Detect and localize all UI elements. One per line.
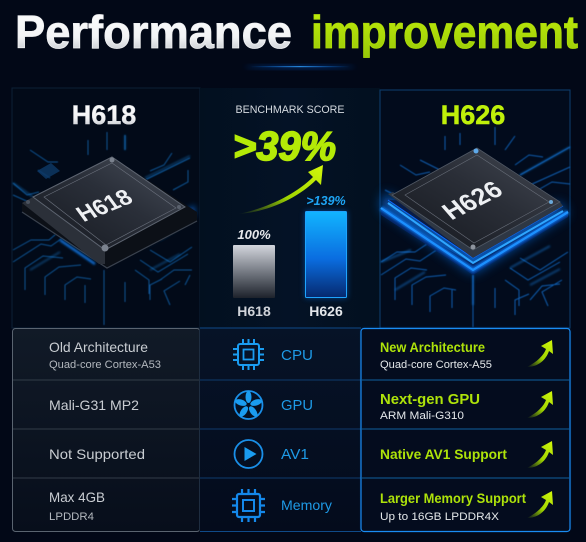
H626 heading: H626 [441,100,505,130]
row CPU new: New Architecture [380,339,485,355]
label: GPU: GPU [281,397,313,414]
chip H626 [381,148,568,275]
row GPU new: Next-gen GPU [380,392,480,408]
row GPU new: ARM Mali-G310 [380,410,464,422]
icon: CPU [233,339,264,370]
icon: AV1 play [234,440,262,468]
row GPU new [380,391,553,422]
comparison table: feature column [200,328,361,532]
panel: H618 [12,88,200,328]
row AV1 new [380,441,553,468]
glow beside chip [145,205,195,245]
row CPU old: Quad-core Cortex-A53 [49,359,161,371]
label: CPU: CPU [281,347,313,364]
circuit traces [13,132,192,325]
row CPU old [49,339,161,371]
value >139%: >139% [306,194,346,208]
arrow up [527,340,553,367]
row memory new: Up to 16GB LPDDR4X [380,511,500,523]
row AV1 old: Not Supported [49,446,145,462]
row CPU new [380,339,553,371]
row memory old: Max 4GB [49,489,105,505]
benchmark heading: BENCHMARK SCORE [236,104,344,116]
row memory new [380,490,553,523]
comparison table: H626 column [361,328,570,532]
bar chart [233,194,347,319]
label: AV1: AV1 [281,446,309,463]
title word: Performance: Performance [15,6,292,58]
bar H626 [305,211,347,298]
rising arrow [238,165,323,214]
bar label H626: H626 [309,303,343,319]
H618 heading: H618 [72,100,136,130]
row CPU old: Old Architecture [49,339,148,355]
value 100%: 100% [237,227,271,242]
icon: memory [232,489,265,522]
arrow up [527,491,553,518]
chip label H618: H618 [71,184,137,226]
label: Memory: Memory [281,497,332,513]
icon: GPU fan [234,391,263,419]
arrow up [527,391,553,418]
small component [37,163,60,179]
bar label H618: H618 [237,303,271,319]
panel: H626 [380,90,570,328]
big percentage: >39% [233,123,336,169]
row memory old: LPDDR4 [49,511,94,523]
panel: benchmark [200,88,380,328]
title glow line [245,65,355,69]
chip label H626: H626 [437,177,509,225]
row GPU old: Mali-G31 MP2 [49,397,139,413]
row memory old [49,489,105,523]
bar H618 [233,245,275,298]
comparison table: H618 column [12,328,200,532]
circuit traces [381,127,570,327]
row CPU new: Quad-core Cortex-A55 [380,359,492,371]
row AV1 new: Native AV1 Support [380,446,507,462]
title [15,6,578,58]
arrow up [527,441,553,468]
row memory new: Larger Memory Support [380,490,526,506]
chip H618 [22,157,197,269]
